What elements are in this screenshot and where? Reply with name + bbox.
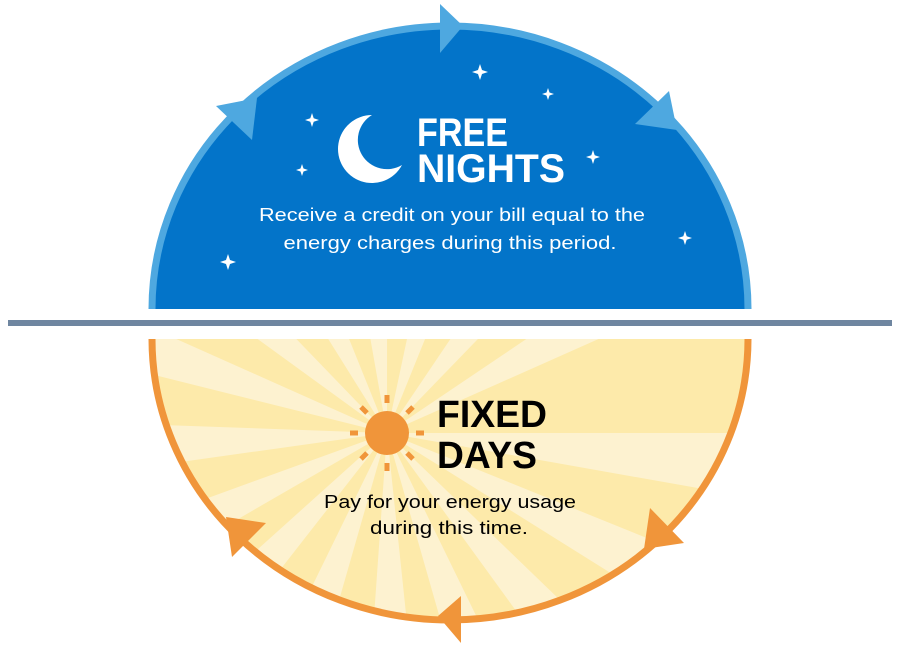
icon: sun xyxy=(350,395,424,471)
heading: FREE NIGHTS: NIGHTS xyxy=(417,147,565,191)
text: night description xyxy=(259,205,645,253)
text: night description: energy charges during this period. xyxy=(284,233,616,253)
panel: free nights (night half) xyxy=(152,26,748,309)
heading: FIXED DAYS: FIXED xyxy=(437,394,547,436)
panel: fixed days (day half) xyxy=(148,339,752,624)
arrows: night cycle xyxy=(216,4,677,140)
heading: FIXED DAYS: DAYS xyxy=(437,435,537,477)
heading: FIXED DAYS xyxy=(437,394,547,477)
divider: horizon line xyxy=(8,320,892,326)
text: night description: Receive a credit on your bill equal to the xyxy=(259,205,645,225)
heading: FREE NIGHTS xyxy=(417,111,565,191)
icon: stars xyxy=(220,64,692,270)
icon: moon xyxy=(338,115,402,183)
arrows: day cycle xyxy=(226,508,684,643)
text: day description: Pay for your energy usage xyxy=(324,492,576,512)
text: day description: during this time. xyxy=(370,518,528,538)
heading: FREE NIGHTS: FREE xyxy=(417,111,508,155)
text: day description xyxy=(324,492,576,538)
